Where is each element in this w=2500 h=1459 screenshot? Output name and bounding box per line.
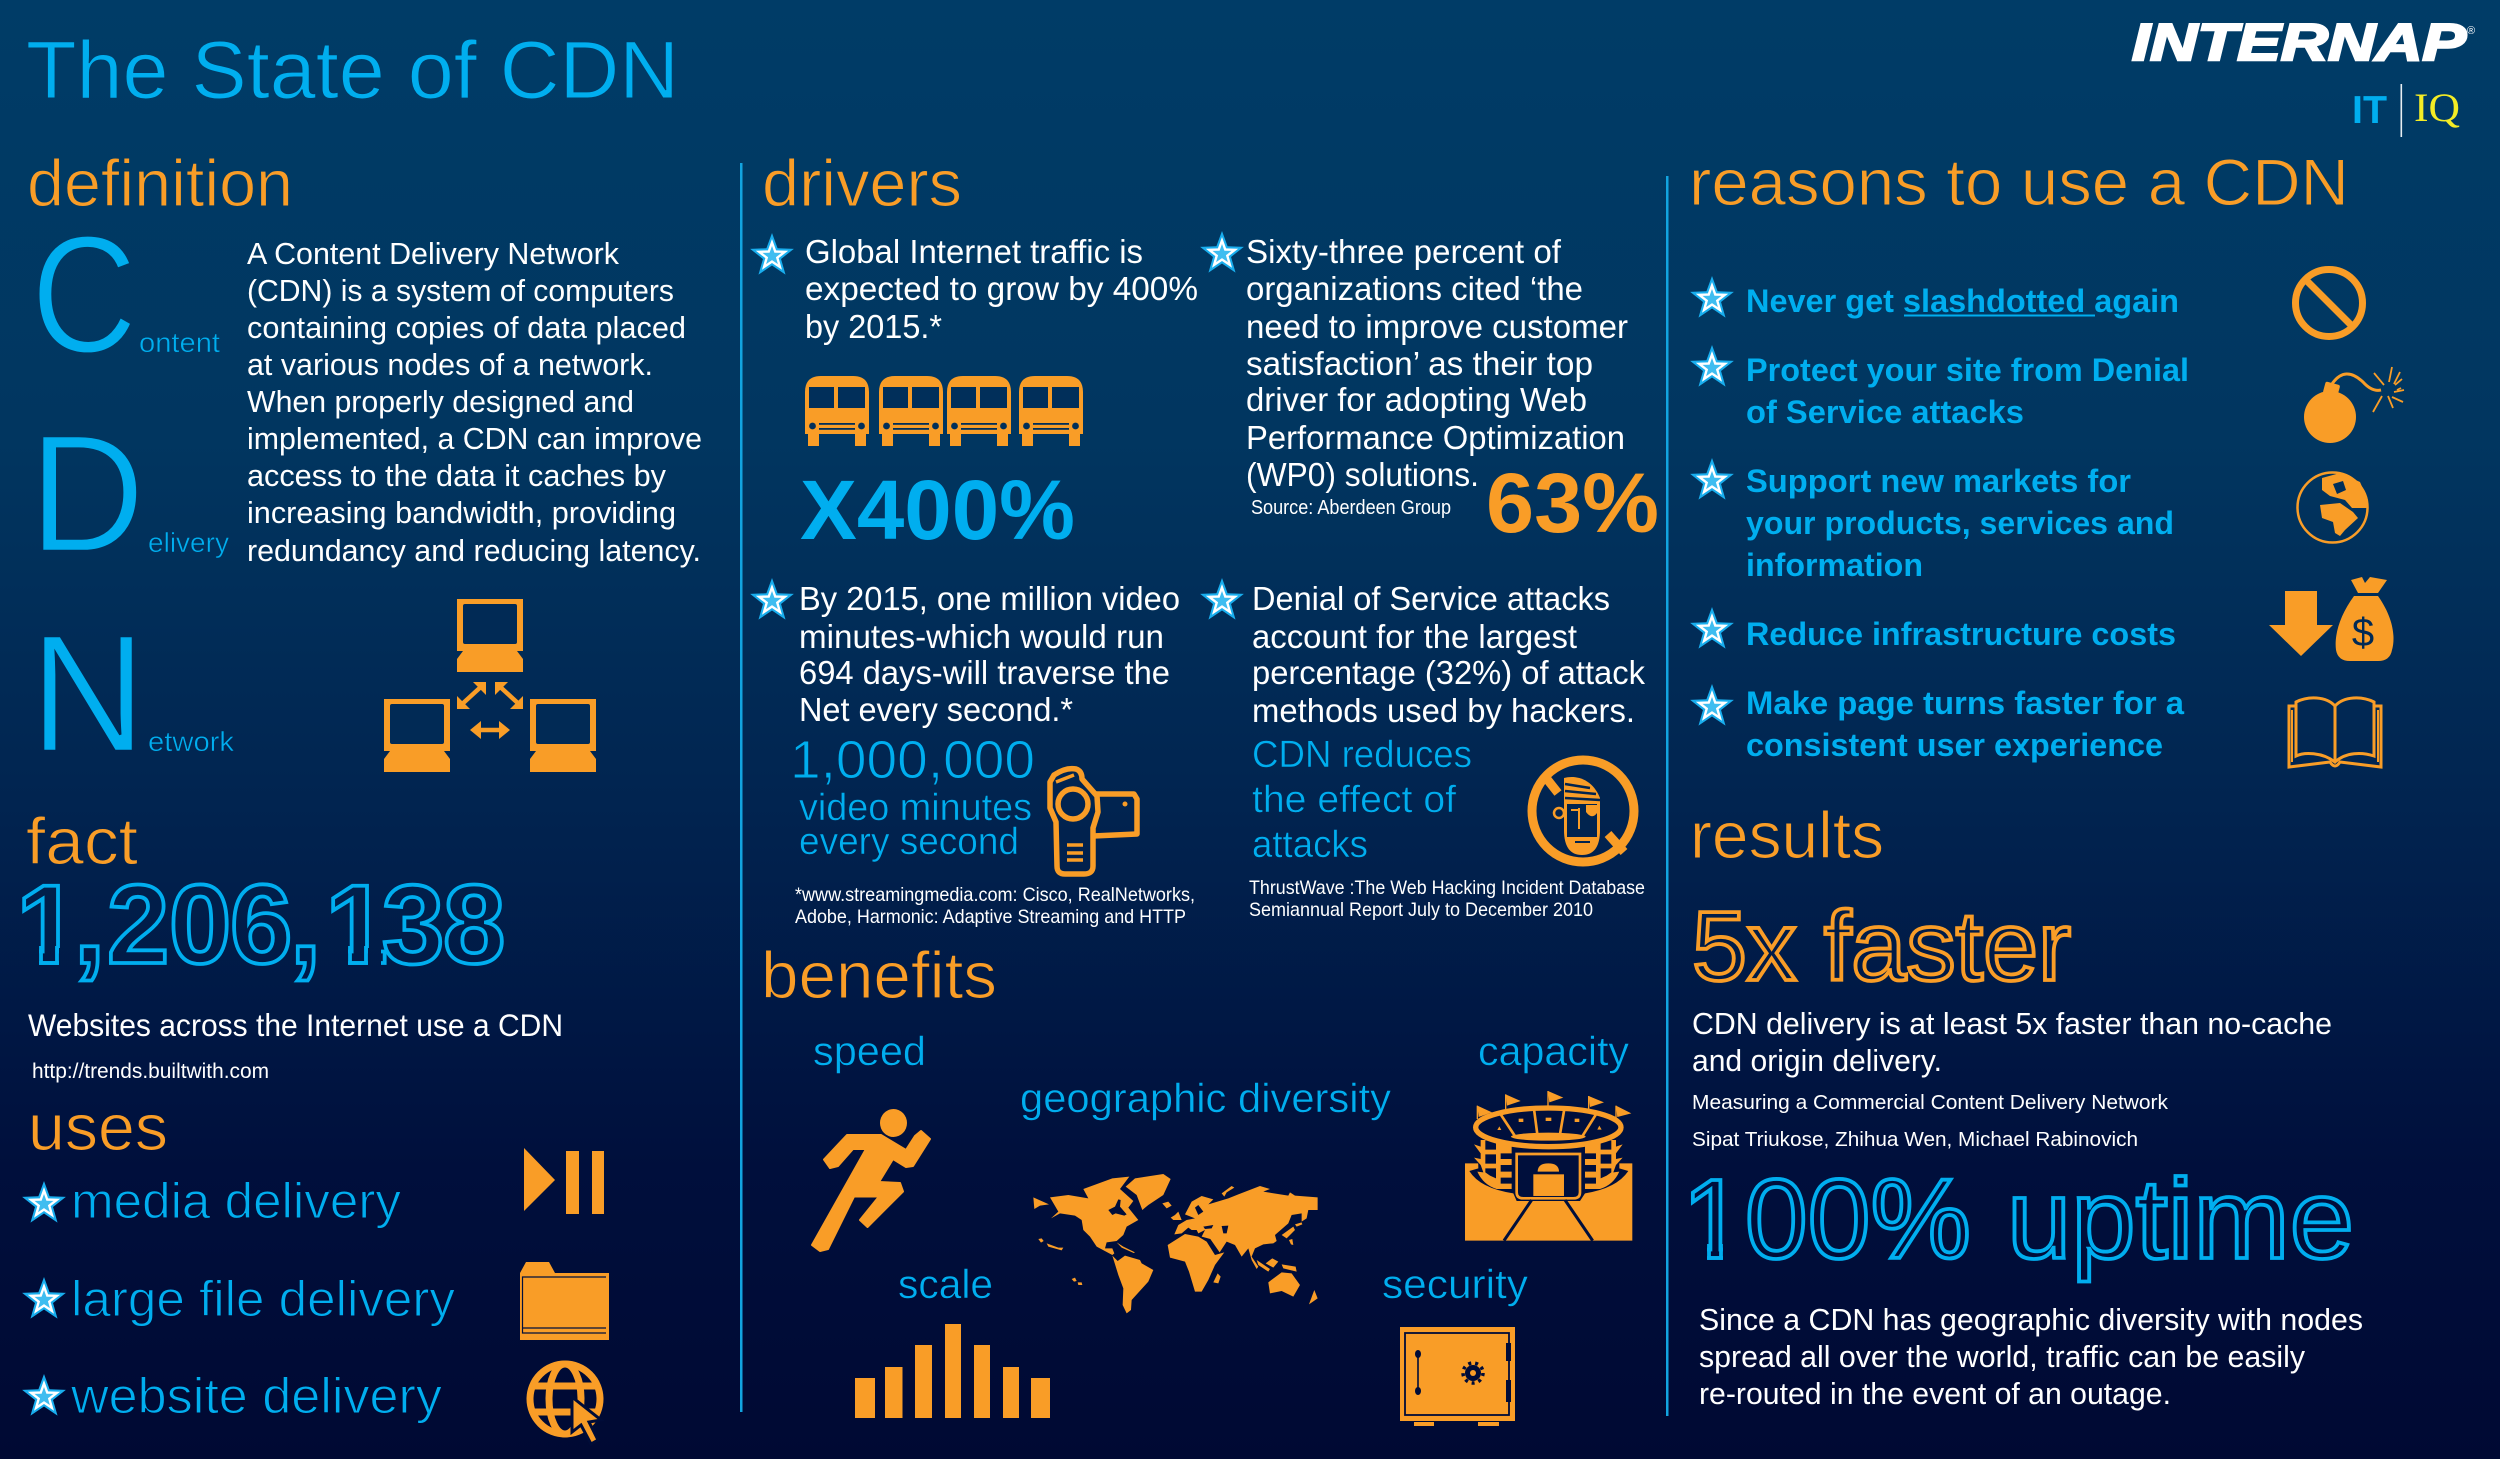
driver: denial of service: percentage (32%) of attack bbox=[1252, 654, 1645, 691]
definition paragraph: (CDN) is a system of computers bbox=[247, 274, 674, 308]
stat: X400%: X400% bbox=[800, 463, 1075, 557]
driver: denial of service: methods used by hackers. bbox=[1252, 692, 1635, 729]
heading: drivers: drivers bbox=[762, 146, 962, 220]
driver: denial of service: CDN reduces bbox=[1252, 734, 1472, 776]
icon: stadium bbox=[1465, 1091, 1632, 1241]
reason: faster page turns: Make page turns faster for a bbox=[1746, 685, 2185, 721]
benefit label: security: security bbox=[1382, 1261, 1529, 1307]
definition paragraph: access to the data it caches by bbox=[247, 459, 667, 493]
benefit label: geographic diversity: geographic diversity bbox=[1020, 1075, 1392, 1121]
definition paragraph: containing copies of data placed bbox=[247, 311, 686, 345]
driver: denial of service: attacks bbox=[1252, 824, 1368, 866]
driver: video minutes bbox=[750, 578, 1195, 928]
reason: never get slashdotted: Never get slashdotted again bbox=[1746, 283, 2179, 319]
result source: Measuring a Commercial Content Delivery Network bbox=[1692, 1091, 2169, 1114]
icon: down arrow and money bag: $ bbox=[2352, 611, 2374, 655]
use: large file delivery: large file delivery bbox=[71, 1271, 455, 1327]
acronym: Content: C bbox=[31, 202, 137, 388]
source note: ThrustWave :The Web Hacking Incident Database bbox=[1249, 877, 1645, 899]
benefit label: capacity: capacity bbox=[1478, 1028, 1629, 1074]
heading: uses: uses bbox=[28, 1090, 168, 1164]
driver: customer satisfaction: driver for adopting Web bbox=[1246, 381, 1587, 418]
reason: protect from denial of service: of Service attacks bbox=[1746, 394, 2024, 430]
fact source: http://trends.builtwith.com bbox=[32, 1060, 269, 1083]
panel: uses bbox=[22, 1090, 609, 1444]
driver: customer satisfaction: satisfaction’ as their top bbox=[1246, 345, 1593, 382]
driver: denial of service: account for the largest bbox=[1252, 618, 1577, 655]
stat: 63%: 63% bbox=[1486, 456, 1659, 550]
heading: results: results bbox=[1690, 798, 1884, 872]
icon: folder bbox=[520, 1262, 609, 1340]
icon: globe bbox=[2298, 472, 2368, 542]
stat: 5x faster: 5x faster bbox=[1692, 891, 2071, 1001]
icon: network of computers bbox=[384, 599, 596, 772]
icon: prohibition sign bbox=[2296, 270, 2362, 336]
use: website delivery: website delivery bbox=[70, 1368, 442, 1424]
driver: video minutes: every second bbox=[799, 821, 1019, 863]
acronym: Content: ontent bbox=[139, 327, 220, 358]
driver: video minutes: video minutes bbox=[799, 787, 1032, 829]
panel: reasons to use a CDN bbox=[1689, 145, 2404, 767]
driver: customer satisfaction: organizations cited ‘the bbox=[1246, 270, 1583, 307]
icon: world map bbox=[1033, 1174, 1318, 1313]
stat: 1,000,000: 1,000,000 bbox=[790, 730, 1035, 790]
panel: results: re-routed in the event of an outage. bbox=[1699, 1377, 2171, 1411]
reason: support new markets bbox=[1690, 458, 2174, 583]
driver: denial of service: Denial of Service attacks bbox=[1252, 580, 1610, 617]
panel: results: and origin delivery. bbox=[1692, 1044, 1942, 1078]
definition paragraph: implemented, a CDN can improve bbox=[247, 422, 702, 456]
title: The State of CDN bbox=[26, 25, 679, 116]
panel: fact bbox=[16, 804, 563, 1083]
definition paragraph: at various nodes of a network. bbox=[247, 348, 653, 382]
heading: fact: fact bbox=[26, 804, 138, 878]
driver: customer satisfaction: Performance Optimization bbox=[1246, 419, 1625, 456]
driver: internet traffic: Global Internet traffic is bbox=[805, 233, 1143, 270]
driver: internet traffic: expected to grow by 400% bbox=[805, 270, 1198, 307]
logo: Internap IT IQ bbox=[2132, 14, 2475, 137]
logo: Internap IT IQ: INTERNAP bbox=[2132, 14, 2466, 72]
driver: customer satisfaction: need to improve customer bbox=[1246, 308, 1628, 345]
driver: video minutes: Adobe, Harmonic: Adaptive Streaming and HTTP bbox=[795, 906, 1186, 928]
driver: video minutes: Net every second.* bbox=[799, 691, 1073, 728]
acronym: Delivery: D bbox=[29, 401, 145, 587]
icon: bar chart scale bbox=[855, 1324, 1050, 1418]
panel: definition bbox=[27, 146, 702, 787]
reason: faster page turns: consistent user experience bbox=[1746, 727, 2163, 763]
icon: open book bbox=[2289, 698, 2381, 767]
driver: video minutes: 694 days-will traverse the bbox=[799, 654, 1170, 691]
icon: video camera bbox=[1050, 769, 1137, 874]
reason: support new markets: information bbox=[1746, 547, 1923, 583]
reason: protect from denial of service bbox=[1690, 345, 2189, 430]
heading: benefits: benefits bbox=[761, 938, 997, 1012]
result description: CDN delivery is at least 5x faster than no-cache bbox=[1692, 1007, 2332, 1041]
driver: customer satisfaction: Sixty-three percent of bbox=[1246, 233, 1562, 270]
definition paragraph: When properly designed and bbox=[247, 385, 634, 419]
reason: reduce infrastructure costs: Reduce infrastructure costs bbox=[1746, 616, 2176, 652]
driver: customer satisfaction: (WP0) solutions. bbox=[1246, 456, 1479, 493]
benefit label: scale: scale bbox=[898, 1261, 993, 1307]
reason: protect from denial of service: Protect your site from Denial bbox=[1746, 352, 2189, 388]
reason: support new markets: your products, services and bbox=[1746, 505, 2174, 541]
icon: web globe with cursor bbox=[530, 1364, 601, 1444]
definition paragraph: increasing bandwidth, providing bbox=[247, 496, 676, 530]
fact caption: Websites across the Internet use a CDN bbox=[28, 1007, 563, 1043]
driver: internet traffic bbox=[750, 233, 1198, 557]
panel: benefits bbox=[761, 938, 1632, 1426]
icon: down arrow and money bag bbox=[2269, 577, 2394, 661]
big outlined number: 1,206,138 bbox=[16, 862, 505, 987]
icon: safe bbox=[1400, 1327, 1515, 1426]
driver: video minutes: minutes-which would run bbox=[799, 618, 1164, 655]
driver: denial of service bbox=[1200, 578, 1645, 921]
stat: 100% uptime: uptime bbox=[2007, 1156, 2354, 1282]
icon: crossed-out hacker bbox=[1532, 760, 1634, 862]
logo: Internap IT IQ: IQ bbox=[2414, 85, 2460, 130]
stat: 100% uptime bbox=[1682, 1156, 2354, 1282]
driver: customer satisfaction bbox=[1200, 231, 1659, 550]
driver: video minutes: By 2015, one million video bbox=[799, 580, 1180, 617]
driver: denial of service: Semiannual Report July to December 2010 bbox=[1249, 899, 1593, 921]
stat: 100% uptime: 100% bbox=[1682, 1156, 1971, 1282]
uptime description: Since a CDN has geographic diversity with nodes bbox=[1699, 1303, 2363, 1337]
definition paragraph: redundancy and reducing latency. bbox=[247, 534, 701, 568]
icon: bomb bbox=[2304, 367, 2404, 443]
acronym: Delivery: elivery bbox=[148, 527, 229, 558]
acronym: Network bbox=[30, 601, 235, 787]
footnote: *www.streamingmedia.com: Cisco, RealNetworks, bbox=[795, 884, 1195, 906]
panel: results: Sipat Triukose, Zhihua Wen, Michael Rabinovich bbox=[1692, 1128, 2138, 1151]
acronym: Network: etwork bbox=[148, 726, 235, 757]
driver: denial of service: the effect of bbox=[1252, 779, 1456, 821]
driver: internet traffic: by 2015.* bbox=[805, 308, 942, 345]
heading: definition: definition bbox=[27, 146, 293, 220]
panel: results bbox=[1682, 798, 2363, 1411]
acronym: Network: N bbox=[30, 601, 146, 787]
definition paragraph: A Content Delivery Network bbox=[247, 237, 620, 271]
acronym: Delivery bbox=[29, 401, 229, 587]
reason: support new markets: Support new markets for bbox=[1746, 463, 2131, 499]
reason: faster page turns bbox=[1690, 684, 2185, 763]
driver: customer satisfaction: Source: Aberdeen Group bbox=[1251, 496, 1451, 519]
panel: results: spread all over the world, traffic can be easily bbox=[1699, 1340, 2306, 1374]
benefit label: speed: speed bbox=[813, 1028, 926, 1074]
use: media delivery: media delivery bbox=[71, 1173, 401, 1229]
heading: reasons to use a CDN: reasons to use a CDN bbox=[1689, 145, 2349, 219]
logo: Internap IT IQ: IT bbox=[2352, 89, 2387, 132]
icon: four buses bbox=[805, 376, 1083, 446]
logo: Internap IT IQ: ® bbox=[2467, 25, 2475, 37]
definition paragraph bbox=[247, 237, 702, 568]
acronym: Content bbox=[31, 202, 220, 388]
icon: runner bbox=[812, 1109, 930, 1251]
icon: play pause bbox=[524, 1148, 604, 1214]
panel: drivers bbox=[750, 146, 1659, 928]
